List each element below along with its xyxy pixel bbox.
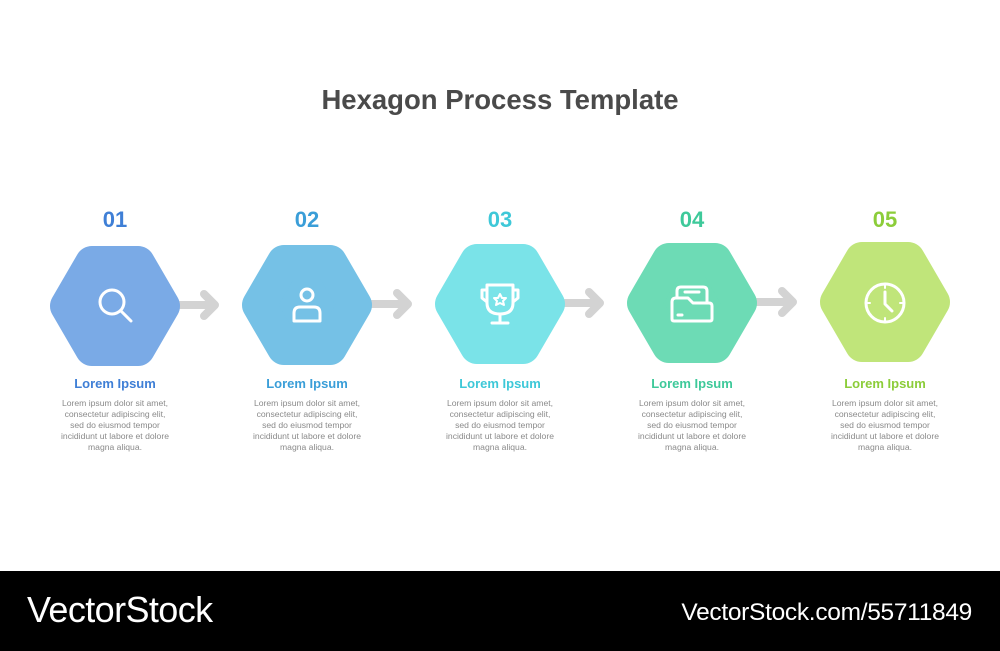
body text 1: consectetur adipiscing elit, [65,409,165,419]
step 1: Lorem Ipsum [74,376,156,391]
body text 4: consectetur adipiscing elit, [642,409,742,419]
arrow 4 [757,291,793,313]
step 5: Lorem Ipsum [844,376,926,391]
hexagon 3 [452,261,548,347]
body text 2: incididunt ut labore et dolore [253,431,361,441]
step 5: 05 [873,207,897,232]
step 3: Lorem Ipsum [459,376,541,391]
step 2: Lorem Ipsum [266,376,348,391]
body text 5: incididunt ut labore et dolore [831,431,939,441]
step 2: 02 [295,207,319,232]
body text 2: consectetur adipiscing elit, [257,409,357,419]
step 2 [253,207,361,452]
body text 5: sed do eiusmod tempor [840,420,930,430]
footer bar: VectorStock.com/55711849 [681,599,972,626]
step 3: 03 [488,207,512,232]
step 4 [638,207,746,452]
icon: folder [672,287,712,321]
hexagon 1 [67,263,163,349]
body text 3: Lorem ipsum dolor sit amet, [447,398,553,408]
body text 2: sed do eiusmod tempor [262,420,352,430]
body text 1: magna aliqua. [88,442,142,452]
step 1 [61,207,169,452]
body text 3: magna aliqua. [473,442,527,452]
body text 4: incididunt ut labore et dolore [638,431,746,441]
body text 1: sed do eiusmod tempor [70,420,160,430]
hexagon 4 [644,260,740,346]
body text 5: Lorem ipsum dolor sit amet, [832,398,938,408]
step 4: 04 [680,207,705,232]
body text 2: Lorem ipsum dolor sit amet, [254,398,360,408]
title: Hexagon Process Template [321,84,679,115]
body text 4: Lorem ipsum dolor sit amet, [639,398,745,408]
body text 3: incididunt ut labore et dolore [446,431,554,441]
body text 2: magna aliqua. [280,442,334,452]
body text 5: magna aliqua. [858,442,912,452]
step 4: Lorem Ipsum [651,376,733,391]
icon: trophy [482,285,518,323]
body text 4: sed do eiusmod tempor [647,420,737,430]
icon: clock [866,284,904,322]
footer bar [0,571,1000,651]
hexagon 5 [837,259,933,345]
step 5 [831,207,939,452]
body text 4: magna aliqua. [665,442,719,452]
step 3 [446,207,554,452]
hexagon 2 [259,262,355,348]
body text 1: Lorem ipsum dolor sit amet, [62,398,168,408]
footer bar: VectorStock [27,589,214,630]
body text 5: consectetur adipiscing elit, [835,409,935,419]
arrow 2 [372,293,408,315]
body text 3: sed do eiusmod tempor [455,420,545,430]
body text 3: consectetur adipiscing elit, [450,409,550,419]
icon: user [294,289,320,321]
body text 1: incididunt ut labore et dolore [61,431,169,441]
arrow 1 [180,294,215,316]
arrow 3 [565,292,600,314]
step 1: 01 [103,207,127,232]
icon: magnifier [100,290,131,321]
